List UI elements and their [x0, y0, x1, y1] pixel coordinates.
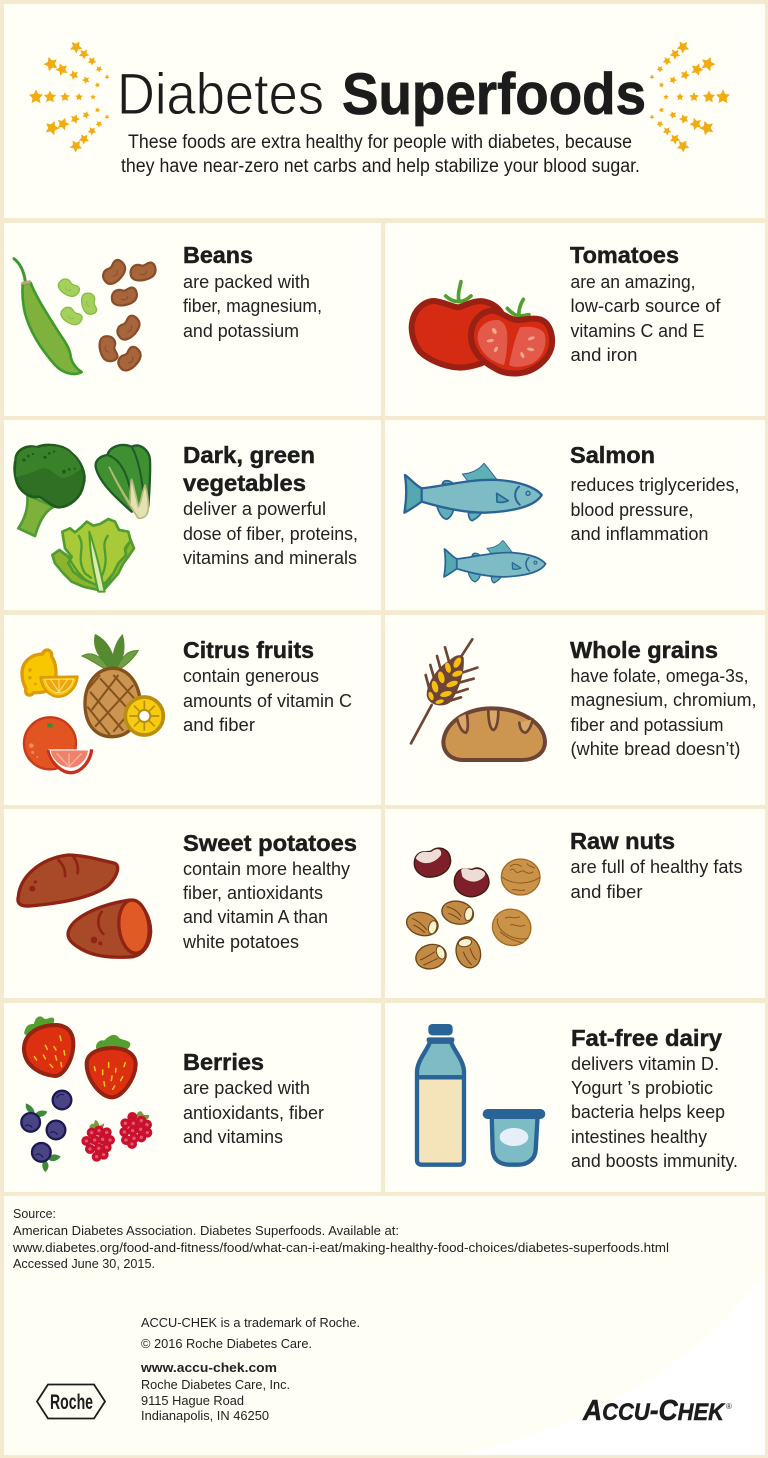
text: citrus fruits: and fiber	[183, 715, 255, 735]
text: salmon: Salmon	[570, 442, 655, 468]
source text: American Diabetes Association. Diabetes Superfoods. Available at:	[13, 1223, 399, 1238]
icon: citrus fruits	[22, 634, 163, 773]
text: whole grains: fiber and potassium	[570, 715, 724, 735]
text: berries	[183, 1049, 324, 1147]
panel: header	[4, 4, 765, 218]
legal and address text: ACCU-CHEK is a trademark of Roche.	[141, 1315, 360, 1330]
text: dark green vegetables: deliver a powerful	[183, 499, 326, 519]
text: berries: antioxidants, fiber	[183, 1103, 324, 1123]
legal and address text	[140, 1315, 360, 1423]
icon: sweet potatoes	[18, 855, 152, 957]
text: berries: Berries	[183, 1049, 264, 1075]
text: whole grains: (white bread doesn’t)	[570, 739, 740, 759]
small fish	[444, 540, 546, 583]
panel: dark green vegetables	[4, 420, 381, 610]
text: fat-free dairy: Fat-free dairy	[571, 1025, 722, 1051]
text: sweet potatoes	[182, 830, 357, 952]
text: fat-free dairy: intestines healthy	[571, 1127, 707, 1147]
legal and address text: © 2016 Roche Diabetes Care.	[141, 1336, 312, 1351]
text: salmon: blood pressure,	[570, 500, 694, 520]
panel: citrus fruits	[4, 615, 381, 805]
text: dark green vegetables: dose of fiber, proteins,	[183, 524, 358, 544]
text: raw nuts: Raw nuts	[570, 828, 675, 854]
legal and address text: Indianapolis, IN 46250	[141, 1408, 269, 1423]
panel: berries	[4, 1003, 381, 1192]
panel: beans	[4, 223, 381, 416]
text: fat-free dairy: delivers vitamin D.	[571, 1054, 719, 1074]
text: sweet potatoes: and vitamin A than	[183, 907, 328, 927]
text: salmon: and inflammation	[570, 524, 708, 544]
intro text: they have near-zero net carbs and help stabilize your blood sugar.	[121, 156, 640, 177]
panel: whole grains	[385, 615, 765, 805]
text: tomatoes: are an amazing,	[570, 272, 696, 292]
logo: ACCU-CHEK: ®	[726, 1402, 732, 1411]
text: tomatoes: and iron	[570, 345, 638, 365]
text: sweet potatoes: Sweet potatoes	[183, 830, 357, 856]
source text: www.diabetes.org/food-and-fitness/food/what-can-i-eat/making-healthy-food-choices/diabetes-superfoods.html	[12, 1240, 669, 1255]
text: beans: are packed with	[183, 272, 310, 292]
text: raw nuts: are full of healthy fats	[570, 857, 742, 877]
text: sweet potatoes: contain more healthy	[183, 859, 350, 879]
panel: footer	[4, 1196, 765, 1455]
text: dark green vegetables: vegetables	[183, 470, 306, 496]
stars: left burst	[29, 38, 110, 154]
logo: Roche: Roche	[50, 1391, 93, 1414]
panel: tomatoes	[385, 223, 765, 416]
text: berries: are packed with	[183, 1078, 310, 1098]
icon: tomatoes	[412, 282, 552, 373]
stars: right burst	[649, 38, 730, 154]
text: dark green vegetables: Dark, green	[183, 442, 315, 468]
text: beans: and potassium	[183, 321, 299, 341]
text: berries: and vitamins	[183, 1127, 283, 1147]
source text	[12, 1206, 669, 1271]
icon: raw nuts	[404, 848, 540, 972]
text: whole grains: Whole grains	[570, 637, 718, 663]
intro text	[121, 132, 640, 177]
text: sweet potatoes: white potatoes	[182, 932, 299, 952]
text: tomatoes: Tomatoes	[570, 242, 679, 268]
text: salmon	[570, 442, 740, 544]
text: sweet potatoes: fiber, antioxidants	[183, 883, 323, 903]
icon: berries	[21, 1016, 152, 1172]
text: beans: fiber, magnesium,	[183, 296, 322, 316]
text: dark green vegetables: vitamins and minerals	[183, 548, 357, 568]
legal and address text: www.accu-chek.com	[140, 1360, 277, 1375]
text: tomatoes	[570, 242, 722, 365]
panel: raw nuts	[385, 809, 765, 998]
text: whole grains: have folate, omega-3s,	[570, 666, 748, 686]
text: fat-free dairy: bacteria helps keep	[571, 1102, 725, 1122]
source text: Accessed June 30, 2015.	[13, 1256, 155, 1271]
text: beans	[183, 242, 322, 341]
legal and address text: Roche Diabetes Care, Inc.	[141, 1377, 290, 1392]
text: raw nuts: and fiber	[570, 882, 642, 902]
text: salmon: reduces triglycerides,	[570, 475, 740, 495]
title: Superfoods	[342, 62, 646, 127]
text: fat-free dairy	[571, 1025, 738, 1171]
icon: broccoli and leafy greens	[15, 445, 150, 592]
text: fat-free dairy: Yogurt ’s probiotic	[571, 1078, 713, 1098]
text: citrus fruits: amounts of vitamin C	[183, 691, 352, 711]
logo: ACCU-CHEK: ACCU-CHEK	[582, 1395, 726, 1427]
icon: milk bottle and yogurt	[417, 1024, 545, 1165]
text: beans: Beans	[183, 242, 253, 268]
title	[117, 62, 646, 127]
intro text: These foods are extra healthy for people with diabetes, because	[128, 132, 632, 153]
panel: salmon	[385, 420, 765, 610]
icon: beans	[14, 258, 156, 374]
text: dark green vegetables	[183, 442, 358, 568]
icon: wheat and bread	[411, 639, 545, 760]
large fish	[404, 463, 542, 521]
text: whole grains: magnesium, chromium,	[570, 690, 756, 710]
text: citrus fruits: contain generous	[183, 666, 319, 686]
text: fat-free dairy: and boosts immunity.	[571, 1151, 738, 1171]
text: raw nuts	[570, 828, 742, 902]
title: Diabetes	[117, 62, 324, 127]
text: tomatoes: low-carb source of	[570, 296, 722, 316]
text: citrus fruits	[183, 637, 352, 735]
text: citrus fruits: Citrus fruits	[183, 637, 314, 663]
text: whole grains	[570, 637, 756, 759]
panel: fat-free dairy	[385, 1003, 765, 1192]
panel: sweet potatoes	[4, 809, 381, 998]
icon: salmon	[404, 463, 546, 583]
source text: Source:	[13, 1206, 56, 1221]
text: tomatoes: vitamins C and E	[570, 321, 704, 341]
legal and address text: 9115 Hague Road	[141, 1393, 244, 1408]
logo: Roche	[37, 1384, 105, 1418]
